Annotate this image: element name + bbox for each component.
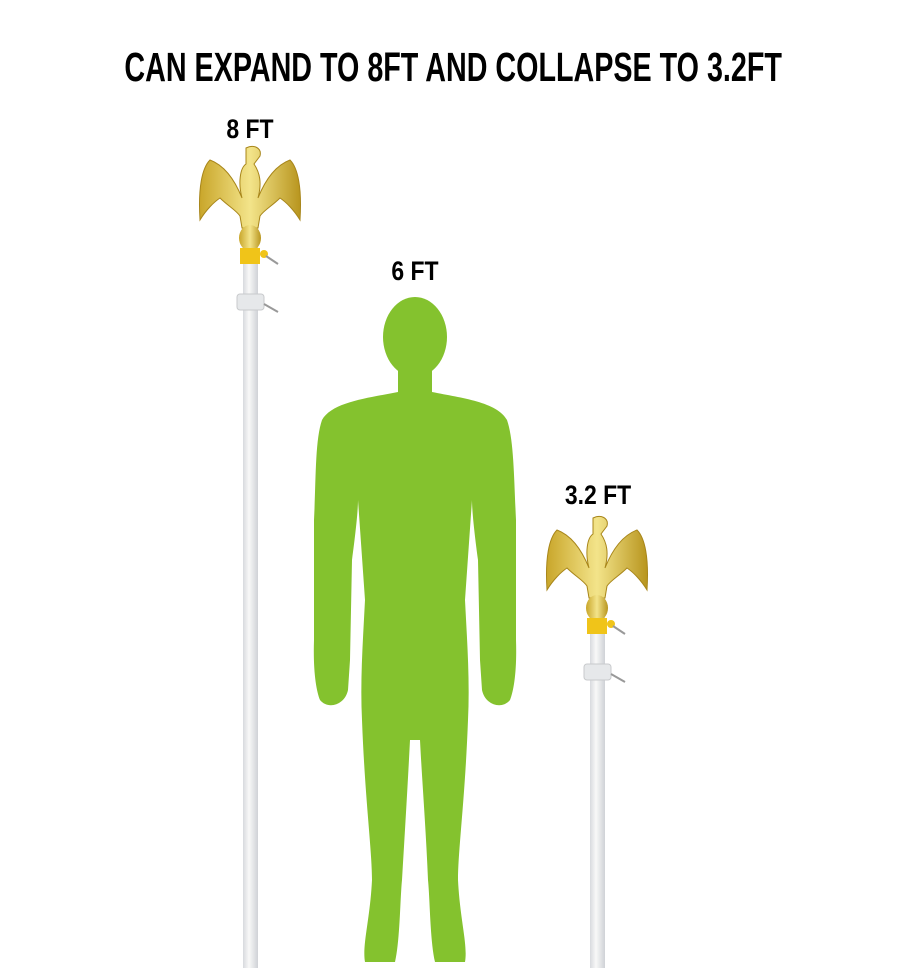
label: 8 FT: 8 FT	[226, 114, 274, 144]
pole: 8ft	[199, 146, 301, 968]
label: 3.2 FT: 3.2 FT	[565, 480, 631, 510]
label: 6 FT: 6 FT	[391, 256, 439, 286]
person silhouette	[314, 297, 516, 962]
pole: 3.2ft	[546, 516, 648, 968]
title: CAN EXPAND TO 8FT AND COLLAPSE TO 3.2FT	[124, 44, 782, 90]
